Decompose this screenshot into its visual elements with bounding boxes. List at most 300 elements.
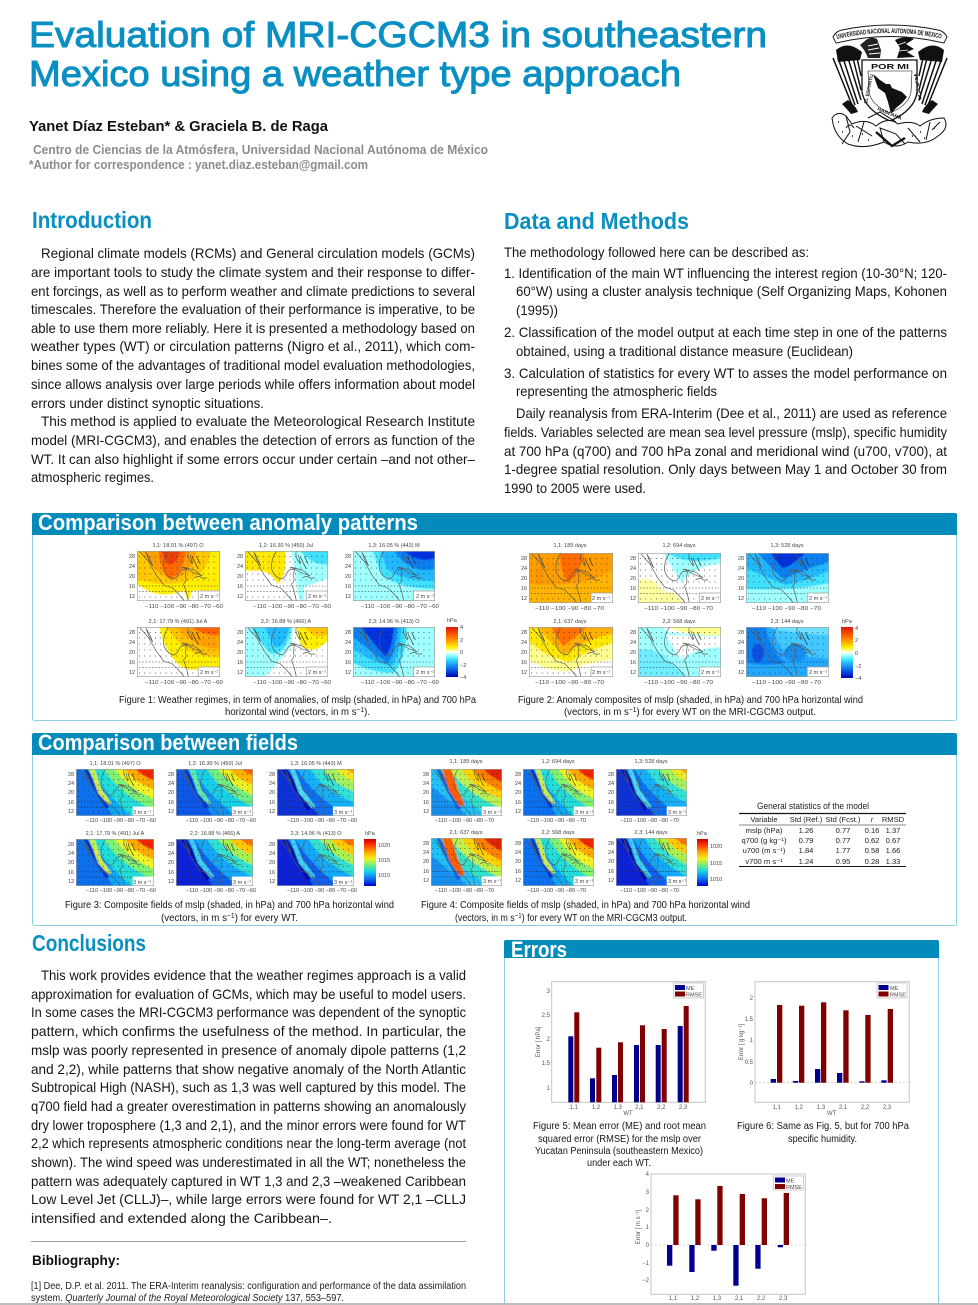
figure 1 maps: 16	[237, 660, 243, 666]
figure 1 maps: −110 −100 −90 −80 −70 −60	[145, 680, 223, 686]
figure 1 maps: −110 −100 −90 −80 −70 −60	[361, 604, 439, 610]
figure 1 maps: −110 −100 −90 −80 −70 −60	[253, 604, 331, 610]
figure 2 maps: 12	[521, 596, 527, 602]
text block: data and methods: 3. Calculation of statistics for every WT to asses the model performance on	[504, 365, 947, 381]
figure 2 maps: 24	[738, 566, 744, 572]
chart: figure 6 humidity error: 1,3	[817, 1105, 826, 1111]
figure 3 maps	[68, 761, 357, 894]
figure 3 maps: 16	[269, 870, 275, 876]
text block: conclusions: pattern was adequately captured in WT 1,3 and 2,3 –weakened Caribbean	[31, 1173, 466, 1189]
figure 2 maps: 12	[738, 596, 744, 602]
figure 4 caption: −1	[515, 913, 522, 920]
figure 2 colour bar: 0	[855, 651, 858, 657]
figure 2 caption	[518, 695, 863, 718]
figure 5 caption: squared error (RMSE) for the mslp over	[538, 1134, 702, 1145]
text block: conclusions: mslp was poorly represented in presence of anomaly dipole patterns (1,2	[31, 1042, 466, 1058]
figure 4 maps: 16	[423, 800, 429, 806]
figure 2 maps: 20	[630, 576, 636, 582]
figure 2 maps: 24	[738, 640, 744, 646]
figure 6 caption	[737, 1121, 909, 1145]
figure 4 maps: 3 m s⁻¹	[483, 810, 501, 816]
figure 1 maps: 24	[345, 564, 351, 570]
figure 3 maps: 16	[168, 870, 174, 876]
figure 1 maps: 16	[129, 584, 135, 590]
chart: figure 7 wind error: 2,2	[757, 1296, 766, 1302]
figure 2 maps: 16	[521, 586, 527, 592]
figure 4 maps: 16	[515, 800, 521, 806]
figure 5 caption: Figure 5: Mean error (ME) and root mean	[533, 1121, 706, 1132]
table: general statistics: 1.37	[886, 826, 900, 835]
figure 3 colour bar	[364, 831, 390, 886]
figure 3 maps: 2,1: 17.79 % (491) Jul A	[86, 831, 145, 837]
figure 2 caption: (vectors, in m s	[564, 707, 632, 718]
figure 4 maps: 24	[515, 781, 521, 787]
heading: Introduction: Introduction	[32, 207, 152, 233]
figure 3 maps: 2,3: 14.96 % (413) O	[290, 831, 342, 837]
chart: figure 7 wind error: 4	[646, 1172, 650, 1178]
text block: introduction: ent forcings, as well as to perform weather and climate predictions to several	[31, 283, 475, 299]
icon: UNAM seal: POR MI	[871, 62, 909, 71]
text block: references	[31, 1281, 466, 1304]
heading: anomaly patterns: Comparison between anomaly patterns	[38, 510, 418, 535]
figure 1 maps: 16	[345, 584, 351, 590]
figure 3 colour bar: 1015	[378, 858, 390, 864]
chart: figure 6 humidity error: WT	[827, 1111, 837, 1117]
figure 2 maps: −110 −100 −90 −80 −70	[644, 680, 713, 686]
icon: UNAM seal: HABLARA	[877, 106, 903, 121]
table: general statistics: 0.95	[836, 857, 850, 866]
figure 3 caption: −1	[227, 913, 235, 920]
chart: figure 6 humidity error: 2,2	[861, 1105, 870, 1111]
figure 1 maps: 2,3: 14.96 % (413) O	[368, 619, 420, 625]
figure 3 caption: ) for every WT.	[235, 913, 298, 924]
figure 2 maps: 20	[738, 576, 744, 582]
figure 4 maps: 28	[608, 772, 614, 778]
figure 2 maps: 28	[738, 630, 744, 636]
figure 3 caption: Figure 3: Composite fields of mslp (shaded, in hPa) and 700 hPa horizontal wind	[65, 900, 394, 911]
figure 4 maps: 28	[515, 772, 521, 778]
panel: comparison between anomaly patterns	[32, 510, 957, 720]
figure 3 maps: −110 −100 −90 −80 −70 −60	[86, 818, 156, 824]
figure 3 maps: 24	[168, 851, 174, 857]
figure 4 maps: −110 −100 −90 −80 −70	[435, 888, 494, 894]
text block: conclusions: and 2,2), while patterns that show negative anomaly of the North Atlantic	[31, 1061, 466, 1077]
heading: fields: Comparison between fields	[38, 730, 298, 755]
figure 2 maps: 28	[521, 556, 527, 562]
figure 3 colour bar: 1010	[378, 873, 390, 879]
chart: figure 6 humidity error: 1.5	[745, 1017, 754, 1023]
figure 1 maps: 24	[237, 564, 243, 570]
table: general statistics: 0.28	[865, 857, 879, 866]
figure 3 maps: 3 m s⁻¹	[334, 810, 352, 816]
figure 1 maps: 2 m s⁻¹	[308, 670, 326, 676]
chart: figure 5 mslp error: RMSE	[686, 992, 702, 998]
figure 4 maps: 24	[423, 781, 429, 787]
figure 1 maps: 1,1: 18.01 % (497) O	[152, 543, 204, 549]
figure 3 maps: 20	[168, 860, 174, 866]
figure 1 maps: 28	[345, 630, 351, 636]
figure 2 maps: 16	[738, 586, 744, 592]
chart: figure 5 mslp error: 3	[547, 989, 551, 995]
panel: comparison between fields	[32, 730, 957, 926]
text block: data and methods	[504, 244, 947, 496]
figure 2 maps: 28	[630, 556, 636, 562]
table: general statistics: mslp (hPa)	[746, 826, 783, 835]
text block: introduction: errors under distinct synoptic situations.	[31, 395, 264, 411]
text block: data and methods: Daily reanalysis from ERA-Interim (Dee et al., 2011) are used as reference	[516, 405, 947, 421]
text block: data and methods: fields. Variables selected are mean sea level pressure (mslp), specific humidity	[504, 424, 947, 440]
figure 2 maps: 12	[738, 670, 744, 676]
figure 3 maps: 20	[68, 860, 74, 866]
figure 4 maps: 20	[423, 790, 429, 796]
figure 4 maps: 20	[423, 859, 429, 865]
text block: conclusions: q700 field had a greater overestimation in patterns showing an anomalously	[31, 1098, 466, 1114]
table: general statistics: v700 m s⁻¹	[745, 857, 783, 866]
text block: introduction: since allows analysis over large periods while offers information about model	[31, 376, 475, 392]
figure 4 maps: 3 m s⁻¹	[575, 810, 593, 816]
figure 3 maps: 28	[269, 772, 275, 778]
figure 1 maps: −110 −100 −90 −80 −70 −60	[361, 680, 439, 686]
chart: figure 7 wind error: 3	[646, 1190, 650, 1196]
figure 3 maps: 16	[68, 800, 74, 806]
figure 4 colour bar	[697, 831, 722, 886]
text block: references: [1] Dee, D.P. et al. 2011. The ERA-Interim reanalysis: configuration and performance of the data assimilation	[31, 1281, 466, 1292]
figure 3 maps: 12	[168, 809, 174, 815]
chart: figure 7 wind error: 1,2	[691, 1296, 700, 1302]
heading: Conclusions: Conclusions	[32, 930, 146, 956]
figure 3 maps: 1,3: 16.05 % (443) M	[290, 761, 342, 767]
text block: conclusions: pattern, which confirms the usefulness of the method. In particular, the	[31, 1023, 466, 1039]
figure 1 maps: 28	[345, 554, 351, 560]
figure 2 maps: 16	[630, 586, 636, 592]
table: general statistics: q700 (g kg⁻¹)	[742, 836, 787, 845]
figure 2 maps: 2 m s⁻¹	[809, 596, 827, 602]
text block: introduction: atmospheric regimes.	[31, 469, 154, 485]
chart: figure 5 mslp error: 1	[547, 1086, 551, 1092]
figure 3 maps: 24	[68, 781, 74, 787]
figure 5 caption: Yucatan Peninsula (southeastern Mexico)	[535, 1146, 703, 1157]
text block: references: system. Quarterly Journal of the Royal Meteorological Society 137, 553–597.	[31, 1293, 344, 1304]
figure 4 colour bar: 1020	[710, 844, 722, 850]
affiliation	[29, 143, 488, 172]
table: general statistics: 0.16	[865, 826, 879, 835]
figure 2 colour bar: −4	[855, 676, 861, 682]
figure 1 maps: 2,2: 16.88 % (466) A	[261, 619, 311, 625]
figure 4 maps: 1,1: 189 days	[449, 759, 483, 765]
figure 3 maps: 3 m s⁻¹	[233, 880, 251, 886]
figure 1 maps: 1,2: 16.30 % (450) Jul	[259, 543, 313, 549]
figure 4 maps: 12	[515, 878, 521, 884]
figure 2 colour bar: −2	[855, 664, 861, 670]
figure 1 maps: 24	[129, 640, 135, 646]
figure 3 maps: 1,2: 16.30 % (450) Jul	[188, 761, 242, 767]
figure 3 colour bar: 1020	[378, 843, 390, 849]
text block: introduction: model (MRI-CGCM3), and enables the detection of errors as function of the	[31, 432, 475, 448]
figure 1 maps: 12	[129, 594, 135, 600]
chart: figure 5 mslp error: 1,1	[570, 1105, 579, 1111]
figure 1 maps: 28	[129, 554, 135, 560]
text block: data and methods: obtained, using a traditional distance measure (Euclidean)	[516, 343, 853, 359]
figure 3 maps: 16	[68, 870, 74, 876]
figure 4 caption	[421, 900, 750, 924]
text block: conclusions: In some cases the MRI-CGCM3 performance was dependent of the synoptic	[31, 1004, 466, 1020]
figure 2 maps: 2 m s⁻¹	[701, 670, 719, 676]
figure 1 colour bar: hPa	[447, 618, 458, 624]
figure 1 maps: 2 m s⁻¹	[200, 670, 218, 676]
figure 1 maps: 12	[237, 594, 243, 600]
text block: data and methods: representing the atmospheric fields	[516, 383, 717, 399]
table: general statistics: r	[871, 815, 874, 824]
figure 2 maps: 28	[521, 630, 527, 636]
text block: data and methods: 1. Identification of the main WT influencing the interest region (10-30°N; 120-	[504, 265, 947, 281]
figure 1 maps: 20	[129, 574, 135, 580]
text block: data and methods: The methodology followed here can be described as:	[504, 244, 809, 260]
figure 4 maps: 16	[608, 800, 614, 806]
figure 1 maps: 20	[345, 574, 351, 580]
chart: figure 6 humidity error: 1	[750, 1038, 754, 1044]
figure 2 maps: 28	[738, 556, 744, 562]
figure 3 maps: 16	[168, 800, 174, 806]
chart: figure 6 humidity error: ME	[890, 986, 899, 992]
figure 6 caption: Figure 6: Same as Fig. 5, but for 700 hPa	[737, 1121, 909, 1132]
figure 2 maps: 16	[738, 660, 744, 666]
figure 2 maps: −110 −100 −90 −80 −70	[752, 680, 821, 686]
text block: data and methods: 1-degree spatial resolution. Only days between May 1 and October 30 from	[504, 461, 947, 477]
figure 3 maps: 3 m s⁻¹	[133, 880, 151, 886]
figure 2 caption: −1	[629, 707, 637, 714]
heading: bibliography: Bibliography:	[32, 1252, 120, 1268]
figure 3 maps: 28	[68, 842, 74, 848]
figure 3 maps: 3 m s⁻¹	[334, 880, 352, 886]
title	[29, 14, 767, 94]
table: general statistics: Variable	[750, 815, 778, 824]
figure 1 caption	[119, 695, 476, 718]
figure 1 maps: 12	[345, 594, 351, 600]
figure 4 maps: 24	[515, 850, 521, 856]
text block: conclusions: dry lower troposphere (1,3 and 2,1), and the minor errors were found for WT	[31, 1117, 466, 1133]
chart: figure 5 mslp error: 1,3	[614, 1105, 623, 1111]
icon: UNAM seal	[832, 24, 948, 148]
figure 3 maps: 12	[68, 809, 74, 815]
affiliation: *Author for correspondence : yanet.diaz.esteban@gmail.com	[29, 158, 368, 172]
figure 3 caption	[65, 900, 394, 924]
chart: figure 5 mslp error: 2	[547, 1037, 551, 1043]
chart: figure 6 humidity error: RMSE	[890, 992, 906, 998]
chart: figure 7 wind error: 2	[646, 1208, 650, 1214]
chart: figure 7 wind error: 2,1	[735, 1296, 744, 1302]
figure 6 caption: specific humidity.	[788, 1134, 857, 1145]
figure 2 maps: 24	[521, 566, 527, 572]
figure 4 maps: 20	[515, 859, 521, 865]
chart: figure 7 wind error: −2	[642, 1278, 650, 1284]
figure 4 maps: −110 −100 −90 −80 −70	[527, 818, 586, 824]
figure 1 maps: 12	[129, 670, 135, 676]
chart: figure 5 mslp error: Error [ hPa]	[536, 1026, 542, 1057]
figure 2 maps: 1,1: 189 days	[553, 543, 587, 549]
figure 3 maps: 20	[269, 790, 275, 796]
figure 4 maps: 20	[608, 859, 614, 865]
figure 4 maps: 28	[608, 841, 614, 847]
chart: figure 7 wind error: 2,3	[779, 1296, 788, 1302]
text block: conclusions: shown). The wind speed was underestimated in all the WT; nonetheless the	[31, 1154, 466, 1170]
figure 1 maps: 2 m s⁻¹	[200, 594, 218, 600]
figure 1 colour bar: 2	[460, 638, 463, 644]
text block: conclusions: This work provides evidence that the weather regimes approach is a valid	[41, 967, 466, 983]
figure 2 maps: 2,2: 568 days	[662, 619, 696, 625]
text block: introduction: bines some of the advantages of traditional model evaluation methodologies,	[31, 357, 475, 373]
figure 2 maps: 20	[521, 576, 527, 582]
authors: Yanet Díaz Esteban* & Graciela B. de Raga	[29, 119, 329, 135]
figure 4 maps: 1,2: 694 days	[541, 759, 575, 765]
figure 2 maps: 16	[630, 660, 636, 666]
eagle and condor heads	[860, 38, 881, 58]
figure 1 colour bar: 0	[460, 650, 463, 656]
table: general statistics: 0.77	[836, 826, 850, 835]
figure 3 maps: 12	[269, 879, 275, 885]
figure 5 caption: under each WT.	[587, 1158, 651, 1169]
figure 2 maps: 16	[521, 660, 527, 666]
figure 3 maps: 12	[68, 879, 74, 885]
table: general statistics: General statistics of the model	[757, 801, 869, 812]
figure 4 maps: 3 m s⁻¹	[668, 810, 686, 816]
figure 2 colour bar: hPa	[842, 619, 853, 625]
figure 2 maps: 12	[521, 670, 527, 676]
figure 2 maps	[521, 543, 829, 686]
figure 1 caption: horizontal wind (vectors, in m s	[225, 707, 362, 718]
heading: Data and Methods: Data and Methods	[504, 208, 689, 234]
figure 1 maps: 24	[237, 640, 243, 646]
chart: figure 5 mslp error: ME	[686, 986, 695, 992]
figure 1 maps: 20	[237, 650, 243, 656]
figure 1 maps	[129, 543, 439, 686]
chart: figure 5 mslp error: 2,1	[635, 1105, 644, 1111]
figure 2 maps: 2 m s⁻¹	[592, 596, 610, 602]
table: general statistics	[739, 801, 906, 866]
figure 4 maps: 12	[423, 809, 429, 815]
text block: conclusions: Low Level Jet (CLLJ)–, while large errors were found for WT 2,1 –CLLJ	[31, 1191, 466, 1207]
text block: introduction: weather types (WT) or circulation patterns (Nigro et al., 2011), which com-	[30, 338, 475, 354]
text block: introduction: WT. It can also highlight if some errors occur under certain –and not other–	[31, 451, 475, 467]
figure 1 maps: 2 m s⁻¹	[416, 594, 434, 600]
text block: conclusions: Subtropical High (NASH), such as 1,3 was well captured by this model. The	[31, 1079, 466, 1095]
figure 3 maps: 24	[168, 781, 174, 787]
figure 1 maps: 16	[345, 660, 351, 666]
figure 3 maps: 1,1: 18.01 % (497) O	[89, 761, 141, 767]
cactus and mountains	[832, 113, 946, 147]
text block: conclusions: approximation for evaluation of GCMs, which may be useful to model users.	[31, 986, 466, 1002]
figure 4 maps: 28	[515, 841, 521, 847]
figure 2 caption: Figure 2: Anomaly composites of mslp (shaded, in hPa) and 700 hPa horizontal wind	[518, 695, 863, 706]
chart: figure 6 humidity error: 2,1	[839, 1105, 848, 1111]
figure 3 maps: 12	[269, 809, 275, 815]
chart: figure 6 humidity error	[739, 982, 909, 1117]
figure 3 maps: −110 −100 −90 −80 −70 −60	[186, 818, 256, 824]
figure 1 colour bar: −2	[460, 663, 466, 669]
figure 1 maps: 2 m s⁻¹	[308, 594, 326, 600]
figure 3 maps: 20	[168, 790, 174, 796]
figure 2 maps: 12	[630, 596, 636, 602]
figure 4 maps: 2,2: 568 days	[541, 830, 575, 836]
chart: figure 7 wind error: 1	[646, 1225, 650, 1231]
figure 1 maps: 12	[345, 670, 351, 676]
chart: figure 7 wind error: 0	[646, 1243, 650, 1249]
text block: data and methods: at 700 hPa (q700) and 700 hPa zonal and meridional wind (u700, v700), at	[504, 443, 947, 459]
chart: figure 7 wind error: 1,3	[713, 1296, 722, 1302]
figure 4 maps: 16	[423, 869, 429, 875]
figure 1 maps: 12	[237, 670, 243, 676]
text block: introduction: This method is applied to evaluate the Meteorological Research Institute	[41, 413, 475, 429]
table: general statistics: 1.77	[836, 846, 850, 855]
figure 4 maps: 20	[515, 790, 521, 796]
figure 4 maps: −110 −100 −90 −80 −70	[527, 888, 586, 894]
table: general statistics: 0.62	[865, 836, 879, 845]
figure 4 maps: −110 −100 −90 −80 −70	[620, 888, 679, 894]
figure 3 maps: 16	[269, 800, 275, 806]
figure 4 maps: 12	[423, 878, 429, 884]
figure 3 maps: −110 −100 −90 −80 −70 −60	[186, 888, 256, 894]
chart: figure 5 mslp error: 1.5	[542, 1061, 551, 1067]
figure 1 maps: 28	[129, 630, 135, 636]
title: Mexico using a weather type approach	[29, 53, 681, 94]
figure 2 maps: 20	[521, 650, 527, 656]
figure 3 maps: −110 −100 −90 −80 −70 −60	[287, 888, 357, 894]
figure 3 maps: 28	[269, 842, 275, 848]
figure 4 maps: 16	[515, 869, 521, 875]
figure 3 maps: 24	[269, 851, 275, 857]
chart: figure 5 mslp error: WT	[623, 1111, 633, 1117]
figure 4 maps: 16	[608, 869, 614, 875]
text block: data and methods: 60°W) using a cluster analysis technique (Self Organizing Maps, Kohonen	[516, 283, 947, 299]
figure 1 colour bar: −4	[460, 675, 466, 681]
figure 3 maps: 3 m s⁻¹	[133, 810, 151, 816]
chart: figure 5 mslp error: 2,2	[657, 1105, 666, 1111]
table: general statistics: RMSD	[882, 815, 905, 824]
shield	[862, 60, 917, 121]
table: general statistics: 1.26	[799, 826, 813, 835]
figure 3 maps: 28	[168, 772, 174, 778]
icon: UNAM seal: UNIVERSIDAD NACIONAL AUTONOMA DE MEXICO	[836, 28, 942, 39]
figure 1 caption: ).	[364, 707, 370, 718]
figure 1 maps: 2,1: 17.79 % (491) Jul A	[149, 619, 208, 625]
figure 1 maps: 20	[237, 574, 243, 580]
chart: figure 6 humidity error: 1,2	[795, 1105, 804, 1111]
figure 3 maps: 24	[269, 781, 275, 787]
table: general statistics: 0.67	[886, 836, 900, 845]
figure 4 maps: 1,3: 528 days	[634, 759, 668, 765]
figure 3 caption: (vectors, in m s	[161, 913, 229, 924]
figure 1 maps: 24	[345, 640, 351, 646]
figure 2 maps: 20	[630, 650, 636, 656]
figure 2 caption: ) for every WT on the MRI-CGCM3 output.	[636, 707, 816, 718]
figure 4 maps: 2,3: 144 days	[634, 830, 668, 836]
figure 4 maps: 24	[608, 781, 614, 787]
text block: introduction	[30, 245, 475, 485]
chart: figure 7 wind error: −1	[642, 1261, 650, 1267]
figure 3 maps: 20	[269, 860, 275, 866]
figure 2 maps: 24	[630, 640, 636, 646]
panel: errors	[504, 937, 939, 1305]
icon: UNAM seal: RAZA	[913, 73, 923, 103]
left wing	[836, 45, 862, 62]
text block: conclusions	[31, 967, 466, 1226]
heading: errors: Errors	[511, 937, 567, 962]
figure 3 maps: 20	[68, 790, 74, 796]
figure 4 maps: 2,1: 637 days	[449, 830, 483, 836]
figure 4 maps: 3 m s⁻¹	[575, 879, 593, 885]
figure 2 colour bar: 4	[855, 626, 858, 632]
right wing	[918, 45, 944, 62]
chart: figure 6 humidity error: 0.5	[745, 1060, 754, 1066]
